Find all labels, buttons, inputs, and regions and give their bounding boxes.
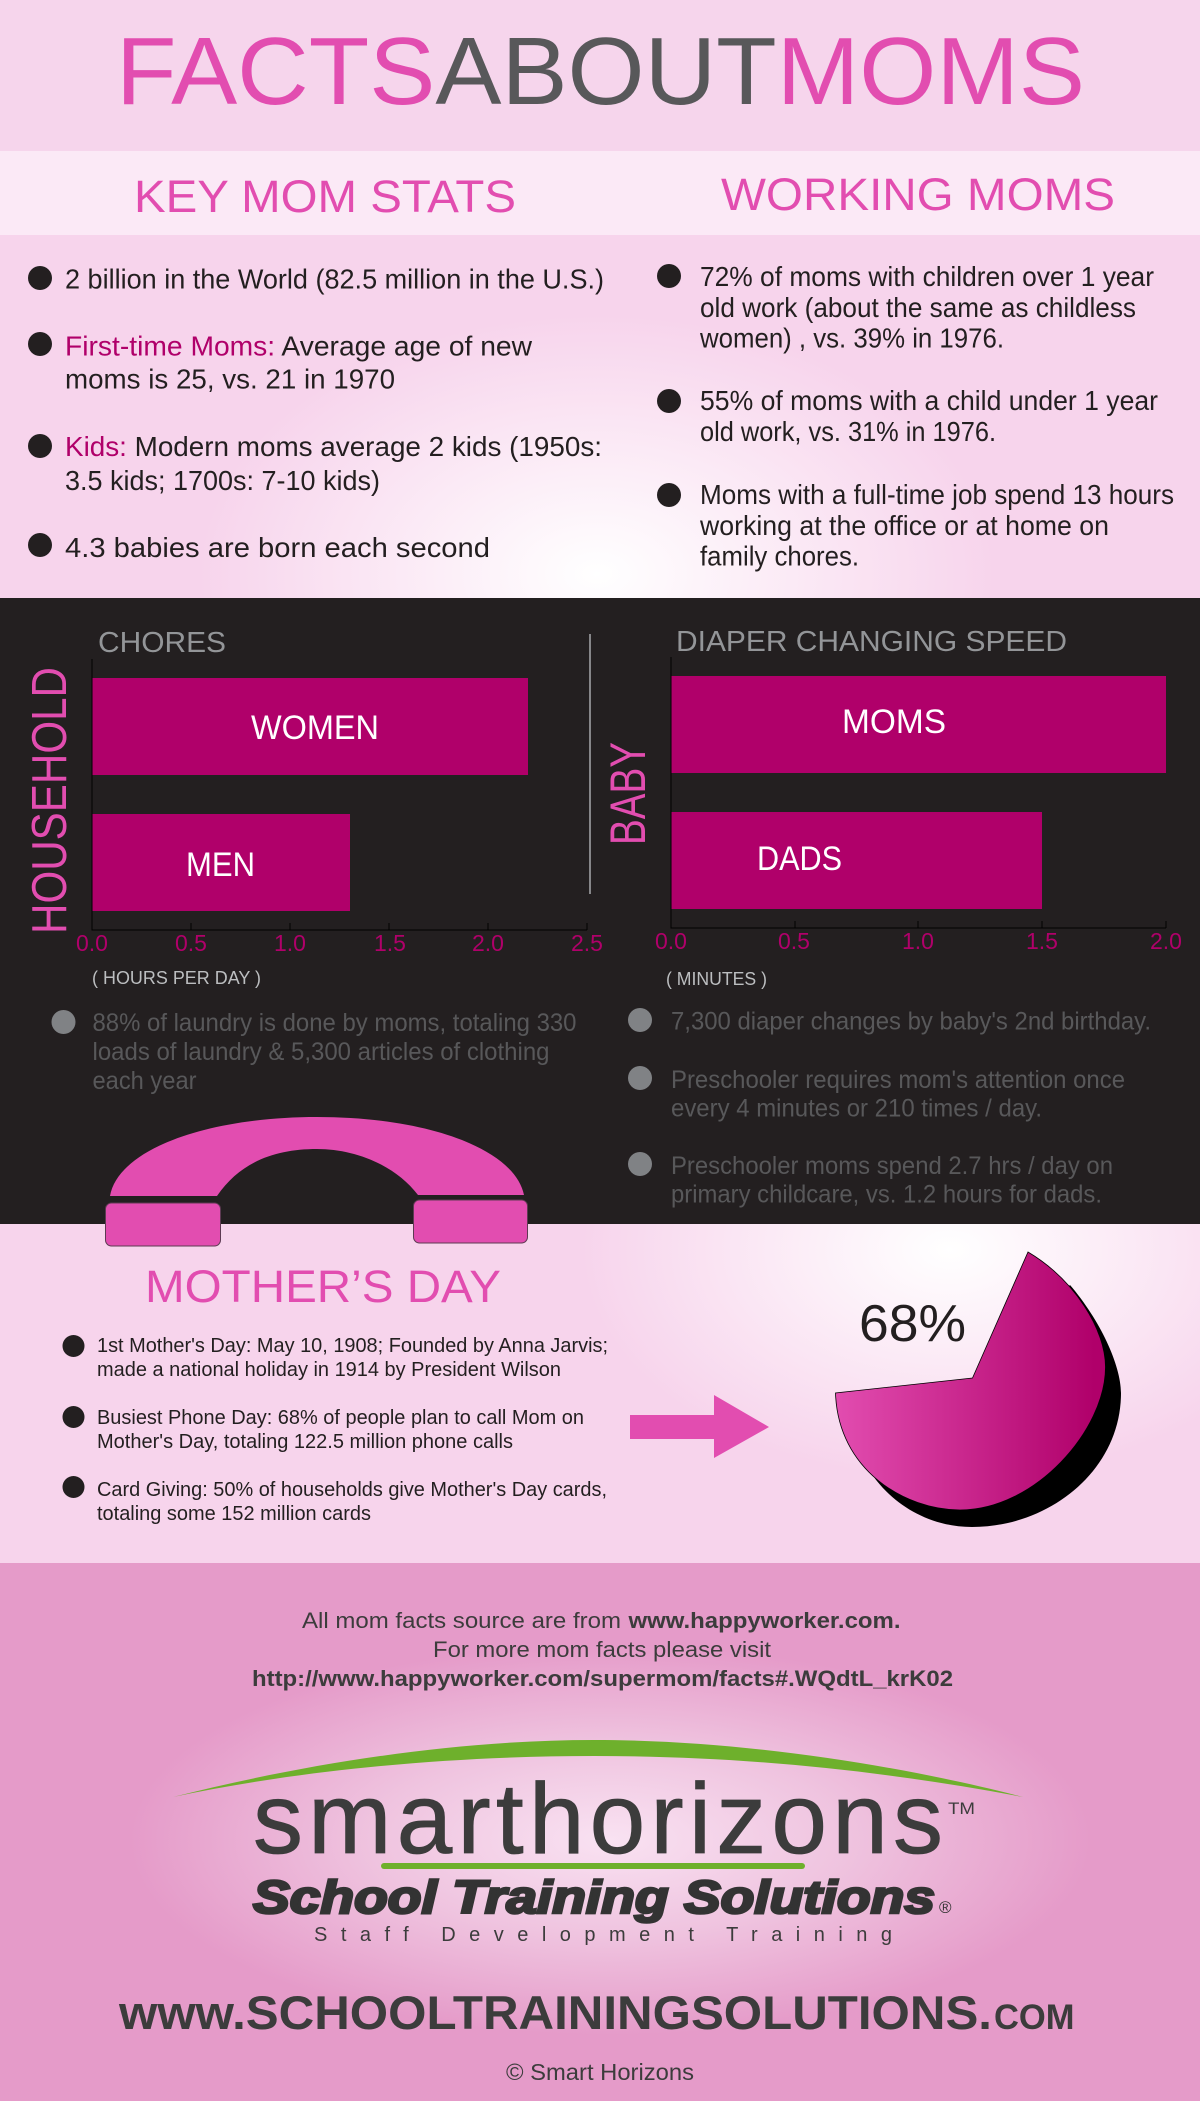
fact: laundry: each year [92, 1067, 196, 1095]
logo wordmark: smarthorizons [253, 1763, 943, 1875]
pie chart: 68 percent [836, 1252, 1121, 1527]
chart title: chores: CHORES [98, 627, 226, 659]
label: household: HOUSEHOLD [23, 667, 77, 934]
axis: hours: 0.5 [175, 930, 207, 956]
trademark: TM [948, 1799, 975, 1818]
axis: minutes: 1.5 [1026, 928, 1058, 954]
fact: preschooler childcare hours: primary childcare, vs. 1.2 hours for dads. [671, 1180, 1102, 1208]
bar: women: WOMEN [251, 709, 379, 747]
bar chart: diaper changing speed [655, 626, 1182, 989]
fact: preschooler childcare hours [628, 1152, 1113, 1208]
stat: full-time job hours: family chores. [700, 540, 859, 572]
stat: moms with child under 1 [657, 385, 1158, 447]
bar: men: MEN [186, 846, 255, 884]
source text: For more mom facts please visit [433, 1637, 771, 1662]
axis: minutes: 2.0 [1150, 928, 1182, 954]
fact: first mother's day: made a national holiday in 1914 by President Wilson [97, 1359, 561, 1381]
heading: working moms: WORKING MOMS [721, 169, 1115, 220]
stat: full-time job hours: Moms with a full-time job spend 13 hours [700, 479, 1174, 510]
title: FACTSABOUTMOMS [116, 18, 1085, 125]
panel: dark charts background [0, 598, 1200, 1224]
axis label: minutes: ( MINUTES ) [666, 969, 767, 989]
axis: minutes: 0.5 [778, 928, 810, 954]
bar: women [92, 678, 528, 775]
fact: laundry: loads of laundry & 5,300 articles of clothing [92, 1038, 550, 1066]
stat: first-time moms: moms is 25, vs. 21 in 1970 [65, 364, 395, 394]
fact: preschooler attention [628, 1066, 1125, 1122]
fact: preschooler childcare hours: Preschooler moms spend 2.7 hrs / day on [671, 1152, 1113, 1180]
panel: key mom stats list [28, 264, 604, 563]
axis label: hours per day: ( HOURS PER DAY ) [92, 968, 261, 988]
copyright: © Smart Horizons [506, 2059, 694, 2085]
axis: hours: 1.0 [274, 930, 306, 956]
fact: busiest phone day [62, 1406, 584, 1453]
axis: minutes: 0.0 [655, 928, 687, 954]
heading: mother's day: MOTHER’S DAY [145, 1261, 501, 1312]
bar: dads: DADS [757, 840, 842, 878]
fact: first mother's day: 1st Mother's Day: May 10, 1908; Founded by Anna Jarvis; [97, 1335, 608, 1357]
stat: moms with children over 1 [657, 261, 1154, 354]
axis: hours: 1.5 [374, 930, 406, 956]
axis: minutes [655, 657, 1182, 954]
icon: telephone handset [106, 1117, 528, 1246]
stat: moms with children over 1: women) , vs. 39% in 1976. [699, 322, 1004, 354]
stat: moms with child under 1: old work, vs. 31% in 1976. [700, 416, 996, 447]
bar: moms [670, 676, 1166, 773]
panel: title band [0, 0, 1200, 151]
value: 68%: 68% [859, 1295, 966, 1353]
stat: kids [28, 431, 602, 496]
axis: hours [76, 659, 603, 956]
fact: diaper changes: 7,300 diaper changes by baby's 2nd birthday. [671, 1008, 1151, 1036]
fact: card giving: totaling some 152 million cards [97, 1503, 371, 1525]
fact: card giving [62, 1476, 607, 1525]
panel: mother's day background [0, 1224, 1200, 1563]
stat: world population of moms: 2 billion in the World (82.5 million in the U.S.) [65, 264, 604, 294]
panel: heading strip [0, 151, 1200, 235]
stat: moms with child under 1: 55% of moms with a child under 1 year [700, 385, 1158, 416]
stat: full-time job hours [657, 479, 1174, 572]
source text: www.happyworker.com. [627, 1608, 900, 1633]
registered mark: ® [939, 1898, 952, 1917]
logo arc [173, 1740, 1023, 1797]
divider line [589, 634, 591, 894]
fact: card giving: Card Giving: 50% of households give Mother's Day cards, [97, 1479, 607, 1501]
stat: moms with children over 1: old work (about the same as childless [700, 292, 1136, 323]
source text: http://www.happyworker.com/supermom/facts#.WQdtL_krK02 [252, 1666, 953, 1691]
fact: busiest phone day: Mother's Day, totaling 122.5 million phone calls [97, 1431, 513, 1453]
stat: first-time moms: First-time Moms: Average age of new [65, 330, 533, 362]
website url: www.SCHOOLTRAININGSOLUTIONS. [118, 1986, 992, 2039]
source text: All mom facts source are from [302, 1608, 621, 1633]
axis: hours: 2.5 [571, 930, 603, 956]
stat: kids: 3.5 kids; 1700s: 7-10 kids) [65, 465, 380, 496]
logo subtitle: School Training Solutions [253, 1871, 935, 1923]
fact: preschooler attention: every 4 minutes or 210 times / day. [671, 1094, 1042, 1122]
bar: men [92, 814, 350, 911]
stat: full-time job hours: working at the office or at home on [699, 510, 1109, 541]
website url: COM [994, 1998, 1074, 2037]
fact: preschooler attention: Preschooler requires mom's attention once [671, 1066, 1125, 1094]
panel: footer background [0, 1563, 1200, 2101]
axis: minutes: 1.0 [902, 928, 934, 954]
label: baby: BABY [600, 742, 656, 845]
stat: kids: Kids: Modern moms average 2 kids (1950s: [65, 431, 602, 462]
chart title: diaper changing speed: DIAPER CHANGING SPEED [676, 626, 1067, 658]
fact: first mother's day [62, 1335, 608, 1381]
arrow [630, 1395, 769, 1458]
green bar [381, 1863, 805, 1869]
logo: smart horizons [173, 1740, 1023, 1946]
axis: hours: 0.0 [76, 930, 108, 956]
bar: dads [670, 812, 1042, 909]
fact: laundry: 88% of laundry is done by moms, totaling 330 [92, 1009, 576, 1037]
source text [252, 1608, 953, 1691]
panel: working moms list [657, 261, 1174, 572]
stat: first-time moms [28, 330, 533, 394]
stat: babies per second: 4.3 babies are born each second [65, 532, 490, 563]
axis: hours: 2.0 [472, 930, 504, 956]
panel: stats background [0, 235, 1200, 598]
fact: busiest phone day: Busiest Phone Day: 68% of people plan to call Mom on [97, 1407, 584, 1429]
bar: moms: MOMS [842, 703, 946, 741]
stat: moms with children over 1: 72% of moms with children over 1 year [700, 261, 1154, 292]
logo tagline: Staff Development Training [314, 1924, 892, 1946]
heading: key mom stats: KEY MOM STATS [134, 171, 516, 222]
fact: laundry [52, 1009, 576, 1095]
bar chart: chores [76, 627, 603, 988]
